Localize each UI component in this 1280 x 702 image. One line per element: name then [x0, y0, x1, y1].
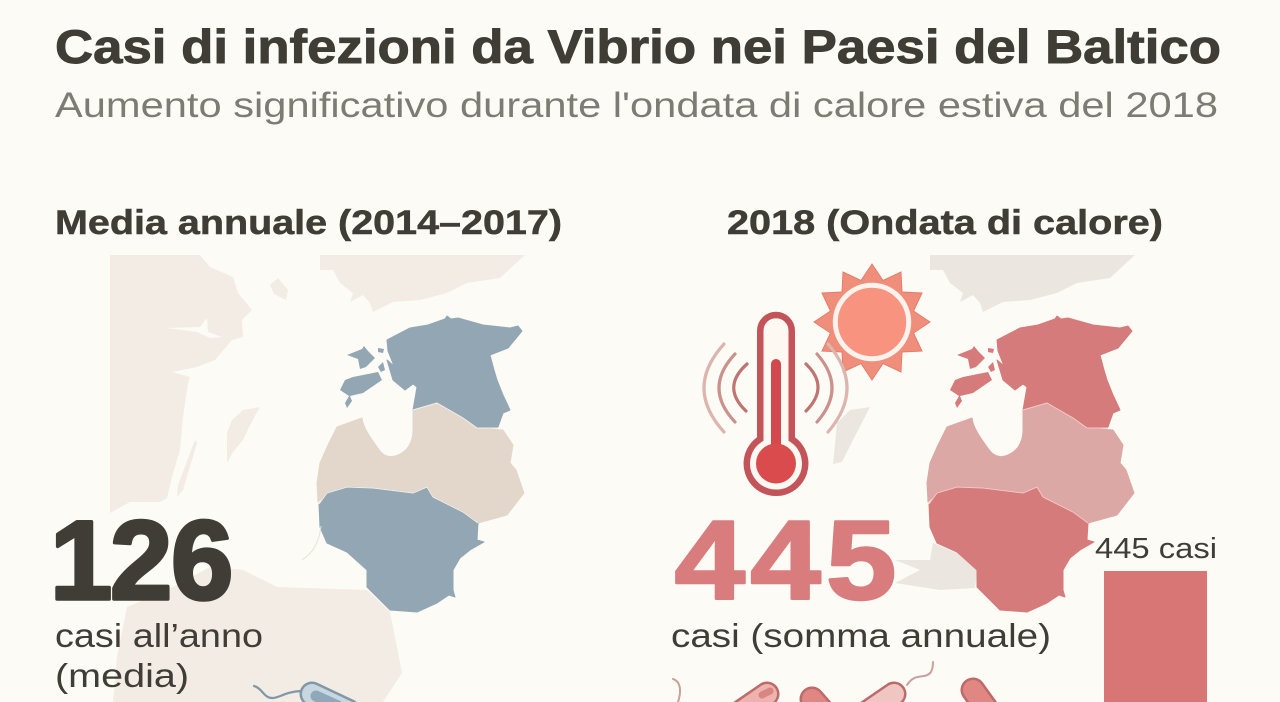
icon: red bacteria: [673, 662, 996, 702]
left panel heading: Media annuale (2014–2017): [55, 204, 562, 242]
caption: average: (media): [55, 657, 189, 694]
bar: 445 cases: [1104, 571, 1207, 702]
border lines: [319, 403, 498, 523]
map: Estonian islands: [950, 346, 995, 408]
map: Latvia: [927, 403, 1134, 523]
panel: 2018 heat wave: [671, 204, 1217, 702]
map: Estonian islands: [340, 346, 385, 408]
icon: blue bacterium: [254, 686, 348, 702]
map: Estonia: [387, 316, 522, 428]
subtitle: Aumento significativo durante l'ondata di calore estiva del 2018: [55, 86, 1218, 125]
curonian spit: [302, 526, 321, 560]
map: Estonia: [997, 316, 1132, 428]
map: Latvia: [317, 403, 524, 523]
right panel heading: 2018 (Ondata di calore): [727, 204, 1163, 242]
background map: lake: [167, 318, 222, 338]
bar label: 445 casi: [1095, 533, 1217, 565]
caption: cases per year: casi all’anno: [55, 617, 263, 654]
caption: annual sum: casi (somma annuale): [671, 617, 1051, 654]
map: Lithuania: [319, 487, 484, 612]
border lines: [929, 403, 1108, 523]
title: Casi di infezioni da Vibrio nei Paesi del Baltico: [55, 20, 1221, 73]
background map: surrounding land: [833, 255, 1135, 590]
icon: thermometer: [747, 315, 805, 493]
number 126: 126: [50, 498, 233, 623]
icon: heat waves: [704, 344, 847, 432]
panel: average 2014-2017: [50, 204, 562, 702]
icon: sun: [814, 264, 930, 380]
number 445: 445: [675, 499, 896, 623]
background map: surrounding land: [110, 255, 525, 702]
map: Lithuania: [929, 487, 1094, 612]
